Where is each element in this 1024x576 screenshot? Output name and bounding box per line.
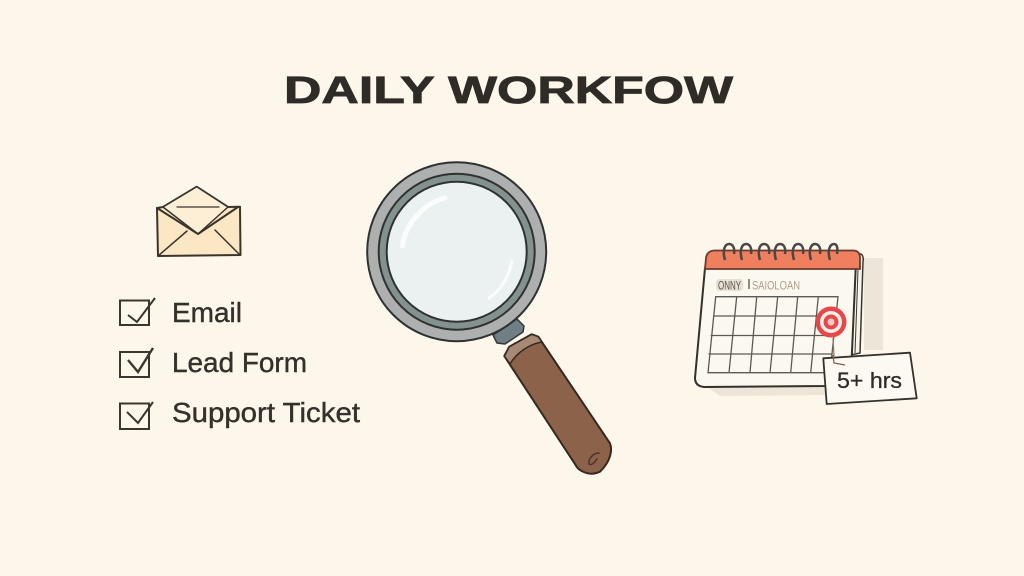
red target marker [816,306,846,356]
tag: 5+ hrs [823,353,917,404]
icon: open envelope [157,187,240,256]
spiral rings [724,244,837,260]
calendar heading [716,278,800,292]
icon: magnifying glass [367,162,611,474]
checklist [120,297,360,429]
calendar heading: ONNY [718,278,741,292]
lens highlights [402,198,512,298]
item: Lead Form: Lead Form [172,347,307,378]
item: Support Ticket: Support Ticket [172,397,360,428]
item: Email: Email [172,297,242,328]
calendar shadow [707,258,883,396]
tag: 5+ hrs: 5+ hrs [837,368,902,393]
page stack [846,254,863,356]
lens [387,182,527,322]
icon: calendar [695,244,917,404]
item: Email [120,297,242,328]
calendar page [695,268,856,387]
handle [504,334,611,474]
calendar grid [708,297,838,373]
handle collar [493,319,524,344]
calendar heading: SAIOLOAN [752,278,800,292]
orange header [705,250,860,269]
title: DAILY WORKFOW [284,70,733,112]
metal rim [367,162,546,341]
